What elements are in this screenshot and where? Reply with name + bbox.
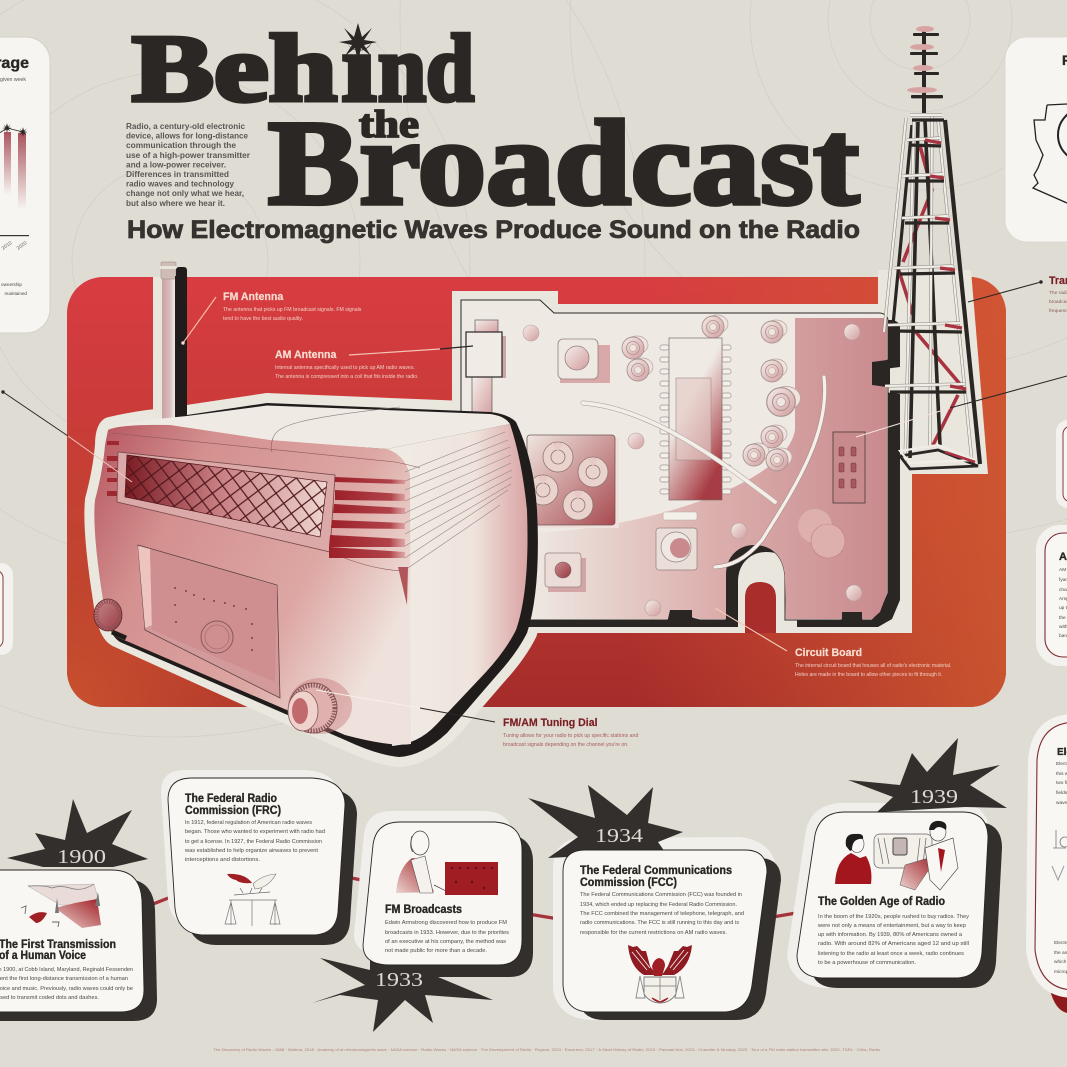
red notch	[745, 582, 776, 640]
radio side face	[387, 424, 528, 746]
cream halo: antenna	[153, 277, 163, 422]
card shadow	[577, 858, 781, 1020]
heading: The First Transmission	[0, 938, 116, 951]
component: connector	[833, 432, 865, 503]
icon: map circle	[1058, 108, 1067, 162]
intro text	[126, 122, 250, 208]
icon: FCC eagle emblem	[628, 945, 692, 1003]
component: AM antenna coil	[466, 320, 506, 417]
panel: AM radio card	[1036, 525, 1067, 666]
heading: Commission (FRC)	[185, 804, 281, 817]
transmitter callout	[968, 275, 1067, 314]
card halo	[161, 770, 338, 927]
wave diagram	[1052, 866, 1064, 880]
heading: The Golden Age of Radio	[818, 895, 945, 908]
panel: red background	[67, 277, 1006, 707]
antennas	[160, 262, 187, 420]
heading: FM Broadcasts	[385, 903, 462, 916]
radio shadow	[103, 403, 538, 757]
body text: broadcasts in 1933. However, due to the priorities	[385, 930, 509, 936]
description: Tuning allows for your radio to pick up specific stations and	[503, 733, 638, 739]
body text: sent the first long-distance transmission of a human	[0, 976, 128, 982]
chart note: ownership	[1, 282, 22, 287]
AM antenna heading: AM Antenna	[275, 349, 337, 361]
component: pill	[663, 512, 697, 520]
body text: In 1912, federal regulation of American radio waves	[185, 820, 312, 826]
radio wave rings	[0, 0, 1067, 737]
tuning dial callout	[316, 690, 638, 748]
card body	[0, 870, 144, 1012]
heading: Circuit Board	[795, 647, 862, 659]
title: Broadcast	[268, 96, 859, 230]
heading: The Federal Radio	[185, 792, 277, 805]
card shadow	[0, 879, 157, 1021]
panel: electromagnetic waves card	[1026, 714, 1067, 1013]
component: square switch	[558, 339, 610, 383]
radio halo	[94, 403, 539, 757]
icon: eagle and scales	[225, 874, 280, 926]
black notch	[872, 362, 890, 386]
FM antenna description: tend to have the best audio quality.	[223, 316, 303, 322]
body text: The FCC combined the management of telephone, telegraph, and	[580, 911, 744, 917]
description	[795, 663, 951, 678]
AM antenna description: The antenna is compressed into a coil that fits inside the radio.	[275, 374, 419, 380]
icon: couple listening to radio	[835, 821, 958, 890]
body text: to be a powerhouse of communication.	[818, 960, 916, 966]
year: 1939: 1939	[910, 786, 958, 808]
components: capacitors	[523, 315, 862, 616]
FM antenna description	[223, 307, 362, 322]
AM antenna callout	[275, 346, 473, 380]
intro text: but also where we hear it.	[126, 199, 225, 208]
description	[503, 733, 638, 748]
title	[132, 16, 859, 230]
bar chart: 2010	[1, 240, 13, 252]
bar chart	[0, 123, 29, 252]
intro text: and a low-power receiver.	[126, 160, 226, 169]
heading	[185, 792, 281, 817]
AM antenna description: Internal antenna specifically used to pick up AM radio waves.	[275, 365, 415, 371]
body text: In 1900, at Cobb Island, Maryland, Reginald Fessenden	[0, 967, 133, 973]
icon: voice wave	[21, 884, 101, 928]
grille frame	[117, 452, 335, 552]
body text: Edwin Armstrong discovered how to produce FM	[385, 920, 507, 926]
body text	[817, 914, 969, 966]
starburst: 1933	[312, 955, 493, 1032]
dot	[1039, 280, 1043, 284]
board pink area	[530, 318, 887, 619]
title: the	[359, 103, 419, 146]
board shadow	[512, 320, 900, 627]
panel: left lower card	[0, 563, 13, 655]
timeline card: FCC	[563, 850, 781, 1020]
card halo	[354, 811, 513, 954]
top seam	[273, 407, 400, 438]
description: broadcast signals depending on the channel you're on.	[503, 742, 629, 748]
component: integrated circuit	[660, 338, 731, 500]
AM antenna description	[275, 365, 419, 380]
description: Holes are made in the board to allow other pieces to fit through it.	[795, 672, 942, 678]
card shadow	[811, 822, 1002, 988]
body text: radio communications. The FCC is still running to this day and is	[580, 920, 739, 926]
body text	[184, 820, 325, 863]
card body	[797, 812, 988, 978]
heading: of a Human Voice	[0, 949, 86, 962]
timeline connector	[148, 875, 802, 920]
FM antenna heading: FM Antenna	[223, 291, 283, 303]
FM antenna	[160, 262, 177, 420]
intro text: Differences in transmitted	[126, 170, 229, 179]
description: The internal circuit board that houses all of radio's electronic material.	[795, 663, 951, 669]
speaker grille	[125, 455, 327, 537]
board body	[461, 300, 888, 620]
title: nd	[378, 16, 474, 122]
cream halo: board and tower	[452, 270, 988, 633]
heading: Commission (FCC)	[580, 876, 677, 889]
body text: In the boom of the 1920s, people rushed to buy radios. They	[818, 914, 969, 920]
intro text: communication through the	[126, 141, 237, 150]
vent lines on side	[405, 432, 512, 570]
card body	[563, 850, 767, 1012]
card shadow	[180, 788, 357, 945]
year: 1934: 1934	[595, 825, 643, 847]
card shadow	[374, 834, 533, 977]
icon: Edwin Armstrong with panel	[396, 831, 498, 895]
front seam lines	[112, 433, 420, 571]
card body	[168, 778, 345, 935]
component: round blobs	[798, 509, 845, 558]
timeline card: FM Broadcasts	[354, 811, 533, 977]
body text	[385, 920, 509, 954]
radio top surface	[108, 406, 510, 449]
body text: were not only a means of entertainment, but a way to keep	[817, 923, 966, 929]
subtitle: How Electromagnetic Waves Produce Sound on the Radio	[127, 216, 860, 244]
panel: left chart card: maintained	[5, 291, 27, 296]
speaker callout leader	[1, 390, 132, 482]
left knob	[94, 599, 126, 638]
body text: The Federal Communications Commission (FCC) was founded in	[580, 892, 742, 898]
card body	[363, 822, 522, 965]
bar chart: 2020	[16, 240, 28, 252]
heading: FM/AM Tuning Dial	[503, 717, 598, 729]
body text: 1934, which ended up replacing the Federal Radio Commission.	[580, 902, 737, 908]
heading	[580, 864, 732, 889]
footer sources: The Discovery of Radio Waves - 1888 · Mathna, 2018 · Anatomy of an electromagnetic wave · NASA science · Radio Waves · NASA science · The Development of Radio · Royson, 2023 · Encoreon, 2017 · A Short History of Radio, 2023 · Pancast Arts, 2023 · Chandler & Munday, 2023 · Tour of a FM radio station transmitter site, 2022, TDRL · Cribs, Radio	[213, 1048, 880, 1052]
timeline card: First Transmission	[0, 870, 157, 1021]
body text: radio. With around 82% of Americans aged 12 and up still	[818, 941, 969, 947]
body text: of an executive at his company, the method was	[385, 939, 506, 945]
panel: right small card	[1056, 420, 1067, 508]
component: dial switch	[656, 528, 697, 570]
tower platforms	[885, 115, 978, 469]
panel: top right map card	[1005, 37, 1067, 242]
component: relay box	[527, 435, 619, 528]
body text: up with information. By 1939, 80% of Americans owned a	[818, 932, 963, 938]
FCC card halo	[553, 837, 775, 1020]
body text: used to transmit coded dots and dashes.	[0, 995, 99, 1001]
timeline card: Federal Radio Commission	[161, 770, 357, 945]
tower antenna discs	[907, 26, 943, 113]
radio	[94, 403, 538, 757]
intro text: device, allows for long-distance	[126, 132, 249, 141]
body text: to get a license. In 1927, the Federal Radio Commission	[185, 839, 322, 845]
title: i	[342, 16, 376, 122]
body text	[0, 967, 133, 1001]
FM/AM tuning dial	[288, 678, 352, 734]
heading: The Federal Communications	[580, 864, 732, 877]
FM antenna callout	[181, 291, 362, 345]
front panel	[138, 545, 280, 698]
side stripes left	[107, 441, 119, 496]
intro text: change not only what we hear,	[126, 189, 244, 198]
starburst: 1900	[7, 799, 148, 867]
leader light part	[316, 690, 420, 708]
heading	[0, 938, 116, 962]
wires	[583, 377, 825, 567]
vent stripes	[329, 477, 405, 558]
intro text: radio waves and technology	[126, 180, 235, 189]
circuit board	[461, 300, 900, 640]
AM leader dark end	[440, 346, 473, 349]
body text: responsible for the current restrictions on AM radio waves.	[580, 930, 727, 936]
body text: not made public for more than a decade.	[385, 948, 487, 954]
timeline card: Golden Age	[797, 812, 1002, 988]
body text: interceptions and distortions.	[185, 857, 260, 863]
intro text: Radio, a century-old electronic	[126, 122, 246, 131]
body text: voice and music. Previously, radio waves could only be	[0, 986, 133, 992]
black antenna	[175, 267, 187, 420]
title: Beh	[132, 16, 337, 122]
radio front face	[94, 425, 411, 745]
transmission tower	[884, 26, 980, 469]
lower body text	[1054, 940, 1067, 975]
tower base	[900, 445, 978, 469]
panel: left chart card	[0, 37, 50, 333]
starburst: 1934	[528, 785, 683, 858]
body text: listening to the radio at least once a week, radio continues	[818, 951, 964, 957]
Golden Age card halo	[787, 803, 990, 988]
side sliver	[398, 567, 408, 605]
tower legs	[884, 115, 980, 464]
FM antenna description: The antenna that picks up FM broadcast signals. FM signals	[223, 307, 362, 313]
chip callout leader	[856, 376, 1067, 437]
body text: began. Those who wanted to experiment with radio had	[185, 829, 325, 835]
FM antenna dot	[181, 341, 185, 345]
intro text: use of a high-power transmitter	[126, 151, 250, 160]
description	[1049, 290, 1067, 314]
body text	[1059, 567, 1067, 639]
icon: microphone	[1053, 830, 1067, 848]
body text	[1056, 761, 1067, 806]
body text: was established to help organize airwaves to prevent	[184, 848, 318, 854]
starburst: 1939	[848, 738, 1007, 812]
year: 1933: 1933	[375, 969, 423, 991]
icon: Arizona map	[1033, 104, 1067, 203]
circuit board callout	[715, 608, 951, 678]
component: small switch	[545, 553, 586, 592]
icon: star over i	[339, 22, 377, 62]
body text	[580, 892, 744, 936]
year: 1900: 1900	[57, 846, 106, 868]
tower red bracing	[898, 146, 965, 445]
